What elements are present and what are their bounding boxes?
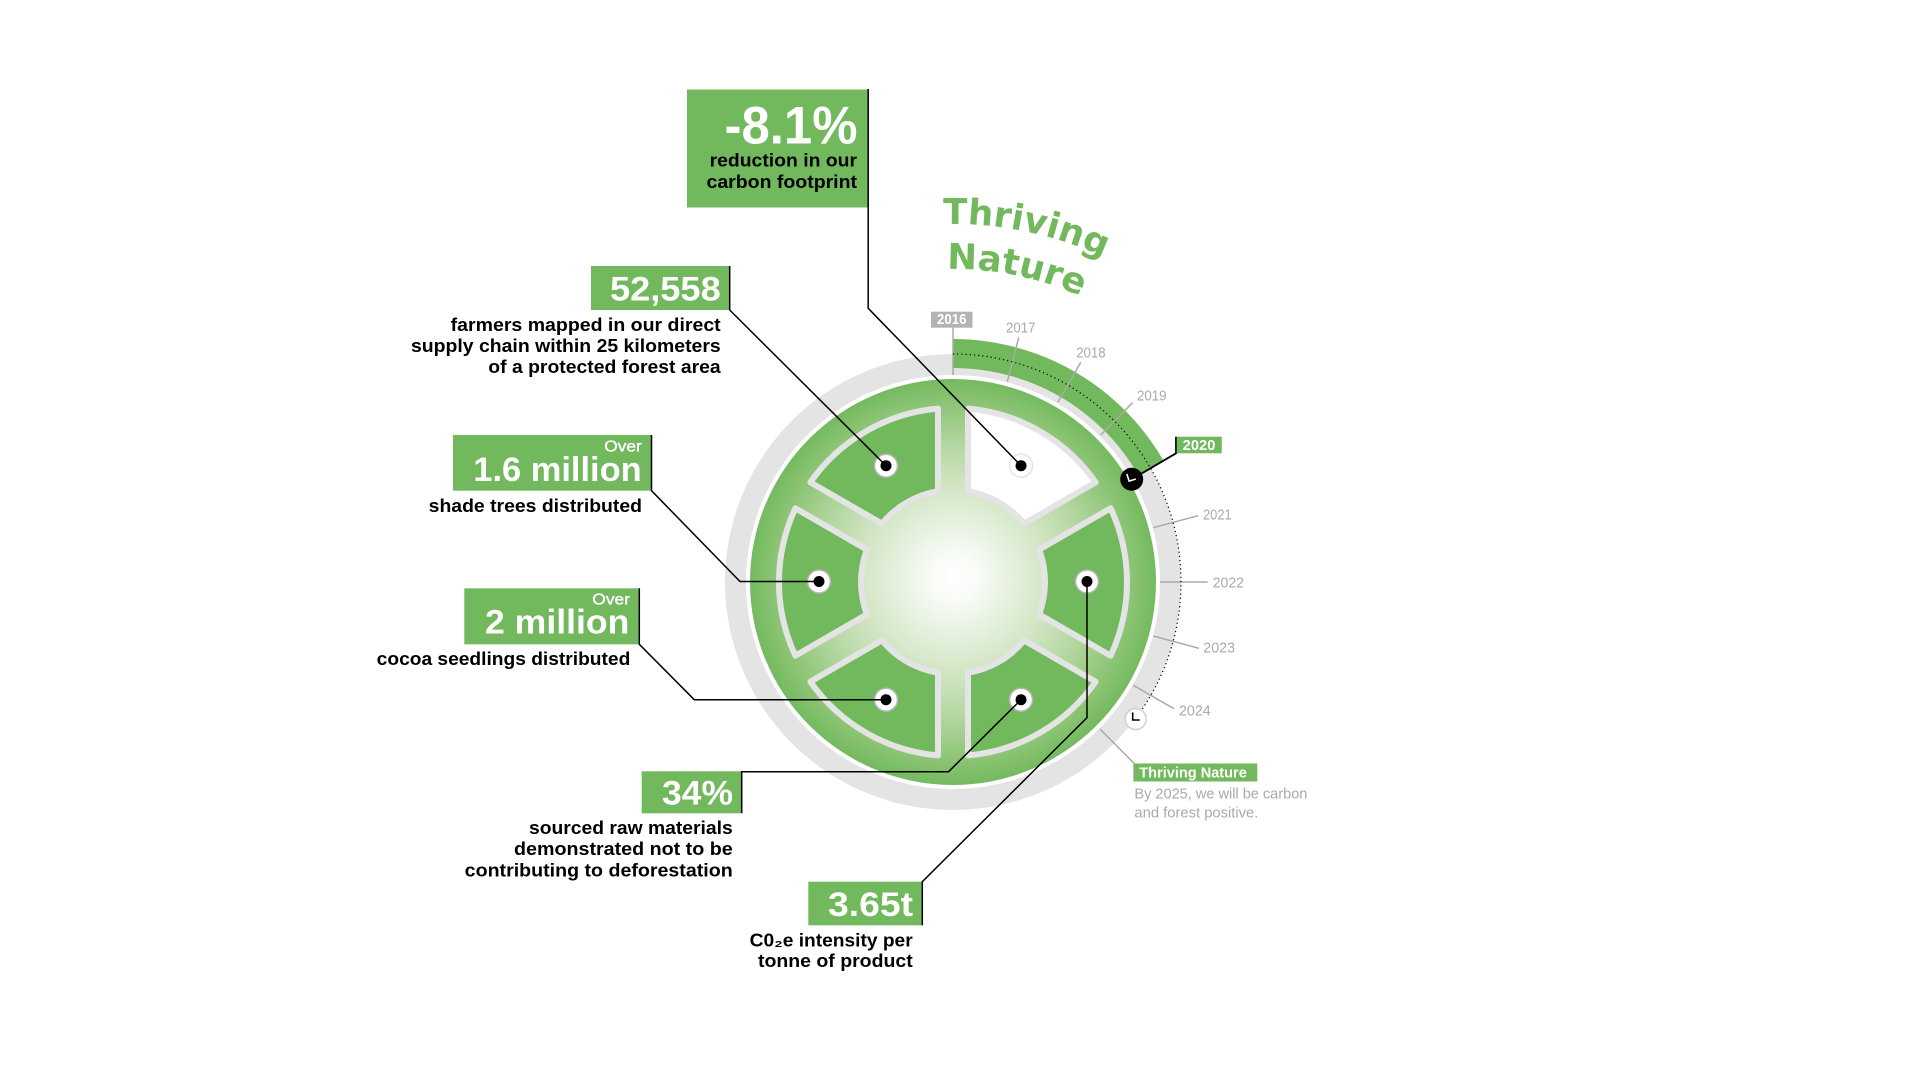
callout: 34% raw materials xyxy=(465,700,1021,881)
segment: carbon footprint xyxy=(968,409,1096,524)
year 2016 xyxy=(931,312,972,375)
callout: 3.65t CO2e intensity: tonne of product xyxy=(758,951,913,971)
callout: 3.65t CO2e intensity xyxy=(750,582,1087,971)
callout: 2 million cocoa seedlings xyxy=(377,588,886,700)
wheel: progress dial xyxy=(725,339,1181,810)
leader line xyxy=(652,435,819,582)
year 2023: 2023 xyxy=(1203,640,1235,656)
year 2019: 2019 xyxy=(1137,388,1166,404)
white separator ring xyxy=(746,375,1160,789)
year 2021: 2021 xyxy=(1203,507,1232,523)
callout: -8.1% carbon footprint: reduction in our xyxy=(710,151,857,171)
outer grey ring xyxy=(725,354,1181,810)
year 2017 xyxy=(1006,320,1036,382)
year 2018 xyxy=(1058,345,1106,402)
callout: 1.6 million shade trees: shade trees distributed xyxy=(429,496,642,516)
year 2021 xyxy=(1153,507,1232,528)
callout: 3.65t CO2e intensity: 3.65t xyxy=(828,886,913,924)
dot: raw materials xyxy=(1010,688,1032,711)
callout note: Thriving Nature goal xyxy=(1100,729,1307,821)
callout: -8.1% carbon footprint xyxy=(687,89,1021,466)
year 2020 current marker xyxy=(1132,437,1222,479)
year 2022 xyxy=(1160,575,1244,591)
progress arc 2016 to 2020 xyxy=(953,339,1163,475)
year 2022: 2022 xyxy=(1213,575,1244,591)
dot: shade trees xyxy=(808,570,830,593)
year 2019 xyxy=(1101,388,1166,435)
callout: 34% raw materials: demonstrated not to be xyxy=(514,839,733,859)
callout: -8.1% carbon footprint: carbon footprint xyxy=(706,172,857,192)
callout note: Thriving Nature goal: and forest positive. xyxy=(1134,805,1258,821)
callout: 52,558 farmers: supply chain within 25 kilometers xyxy=(411,336,721,356)
callout: 1.6 million shade trees: Over xyxy=(604,439,642,456)
icon: black clock 2020 xyxy=(1120,468,1143,491)
segment: shade trees xyxy=(732,488,895,656)
year 2016: 2016 xyxy=(937,312,966,328)
callout: -8.1% carbon footprint: -8.1% xyxy=(724,96,858,156)
dot: CO2e intensity xyxy=(1076,570,1098,593)
callout: 52,558 farmers: 52,558 xyxy=(610,270,721,308)
year 2018: 2018 xyxy=(1076,345,1106,361)
year 2023 xyxy=(1153,636,1235,656)
year 2024: 2024 xyxy=(1179,704,1211,720)
title: Thriving Nature: Nature xyxy=(950,242,1084,294)
gradient disc xyxy=(750,379,1156,785)
callout note: Thriving Nature goal: Thriving Nature xyxy=(1139,766,1247,782)
leader line xyxy=(868,89,1021,466)
dot: farmers mapped xyxy=(874,454,898,477)
callout: 2 million cocoa seedlings: 2 million xyxy=(485,604,629,642)
segment: CO2e intensity xyxy=(1011,508,1174,676)
callout: 1.6 million shade trees xyxy=(429,435,819,582)
year timeline ticks and labels xyxy=(931,312,1244,720)
segment: cocoa seedlings xyxy=(810,640,938,755)
segment: farmers mapped xyxy=(810,372,974,540)
callout: 34% raw materials: 34% xyxy=(662,775,733,813)
leader line xyxy=(639,588,886,700)
callout: 34% raw materials: sourced raw materials xyxy=(529,818,733,838)
year 2017: 2017 xyxy=(1006,320,1036,336)
segment: raw materials xyxy=(932,624,1096,792)
callout: 3.65t CO2e intensity: C0₂e intensity per xyxy=(750,930,913,950)
leader line xyxy=(730,266,886,466)
callout: 52,558 farmers: of a protected forest area xyxy=(488,357,722,377)
title: Thriving Nature: Thriving xyxy=(943,197,1108,260)
dotted timeline track xyxy=(953,354,1181,719)
dot: cocoa seedlings xyxy=(874,688,898,711)
title: Thriving Nature xyxy=(943,197,1108,294)
callout: 52,558 farmers: farmers mapped in our direct xyxy=(451,315,721,335)
callout: 2 million cocoa seedlings: cocoa seedlings distributed xyxy=(377,649,630,669)
leader line xyxy=(922,582,1087,925)
icon: white clock 2025 xyxy=(1125,708,1146,730)
callout: 2 million cocoa seedlings: Over xyxy=(592,591,630,608)
callout note: Thriving Nature goal: By 2025, we will be carbon xyxy=(1134,786,1307,802)
leader line xyxy=(742,700,1021,813)
dot: carbon footprint xyxy=(1010,454,1032,477)
callout: 34% raw materials: contributing to deforestation xyxy=(465,861,733,881)
year 2020 current marker: 2020 xyxy=(1183,438,1215,454)
callout: 52,558 farmers xyxy=(411,266,886,466)
callout: 1.6 million shade trees: 1.6 million xyxy=(473,451,642,489)
year 2024 xyxy=(1133,685,1211,720)
